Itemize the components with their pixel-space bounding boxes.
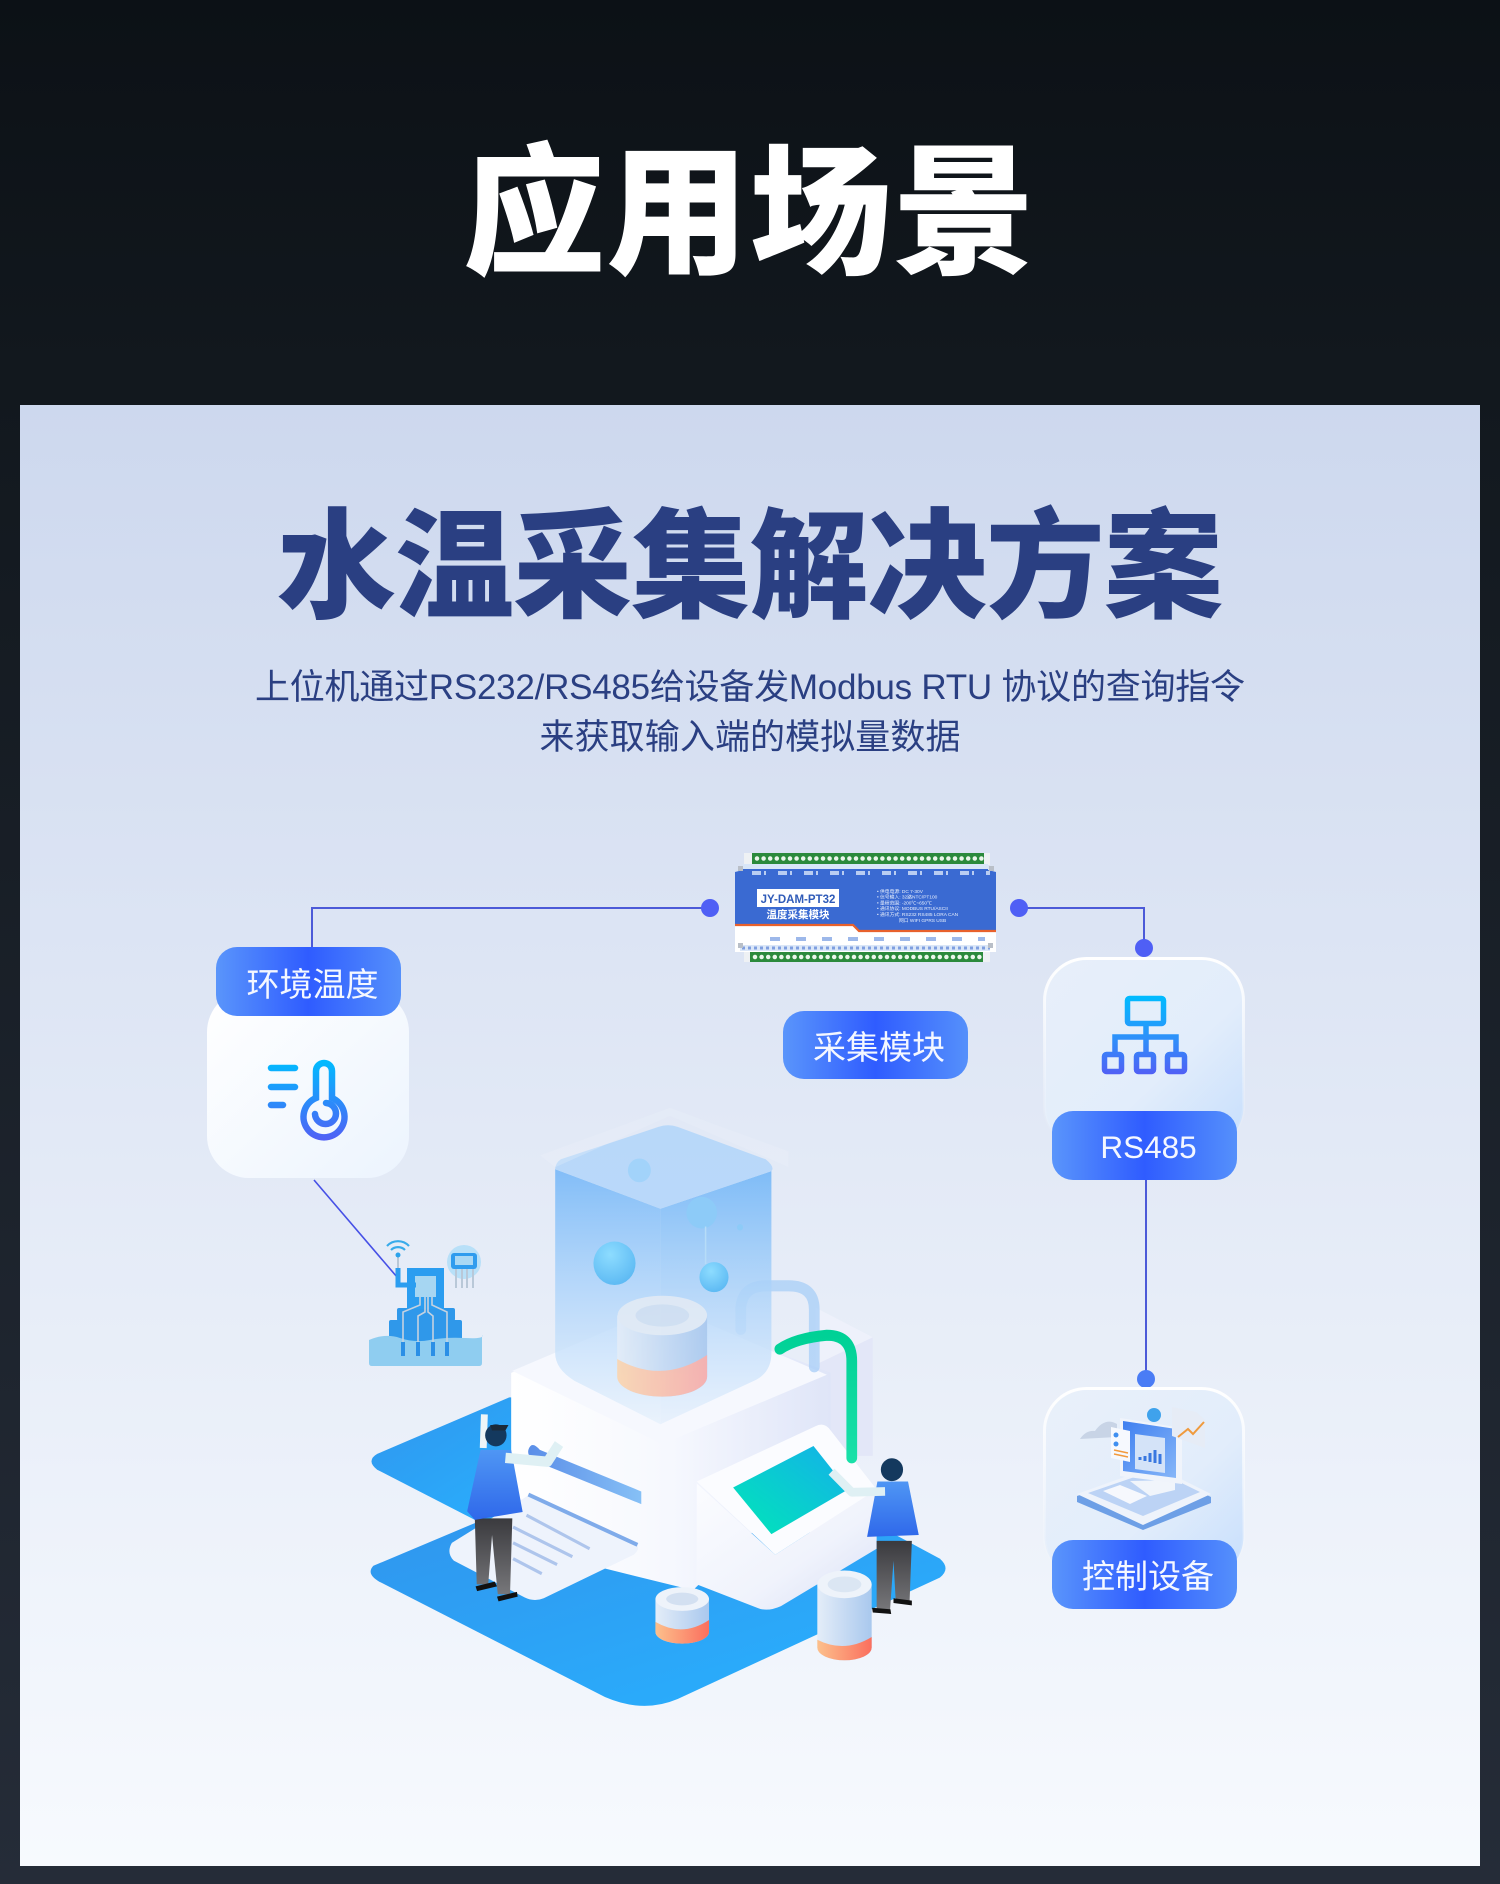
- icon: network tree: [1104, 998, 1184, 1072]
- printer slot: [528, 1445, 641, 1504]
- blue pipe: [741, 1286, 814, 1367]
- small cylinder: [655, 1587, 709, 1644]
- person: right: [831, 1458, 919, 1614]
- chip: ambient temperature: 环境温度: [246, 966, 378, 1003]
- description text: [255, 668, 1245, 757]
- device: acquisition module: • 通讯方式: RS232 RS485 LORA CAN: [877, 911, 959, 918]
- connector dots: [701, 899, 1155, 1388]
- card: RS485: [1044, 958, 1244, 1180]
- device: acquisition module: • 信号输入: 32路NTC/PT100: [877, 894, 938, 900]
- device: acquisition module: 网口 WIFI GPRS USB: [899, 918, 946, 924]
- icon: computer on platform: [1077, 1407, 1211, 1530]
- connector lines: [312, 908, 1146, 1378]
- chip: control equipment: 控制设备: [1082, 1558, 1214, 1595]
- touch screen: [733, 1446, 848, 1534]
- device: acquisition module: • 通讯协议: MODBUS RTU/ASCII: [877, 905, 948, 912]
- chip: acquisition module: 采集模块: [813, 1029, 945, 1066]
- icon: water temperature sensor: [369, 1241, 482, 1366]
- chip: control equipment: [1052, 1540, 1237, 1609]
- paper tray: [449, 1495, 638, 1600]
- card: ambient temperature: [207, 947, 409, 1178]
- machine body: [511, 1310, 831, 1590]
- back block: [815, 1308, 873, 1456]
- panel: solution: [20, 405, 1480, 1866]
- icon: thermometer: [271, 1063, 344, 1137]
- chip: ambient temperature: [216, 947, 401, 1016]
- chip: RS485: [1052, 1111, 1237, 1180]
- description text: 上位机通过RS232/RS485给设备发Modbus RTU 协议的查询指令: [255, 668, 1245, 707]
- illustration: water analysis machine: [371, 1108, 946, 1706]
- heading: water temperature solution: 水温采集解决方案: [277, 501, 1223, 634]
- cylinder in tank: [617, 1296, 707, 1397]
- blue floor plates: [371, 1397, 946, 1706]
- card: control equipment: [1044, 1388, 1244, 1609]
- device: acquisition module: • 供电电源: DC 7-30V: [877, 888, 924, 895]
- chip: acquisition module: [783, 1011, 968, 1079]
- tall cylinder: [817, 1571, 872, 1660]
- title: 应用场景: [463, 135, 1035, 294]
- device: acquisition module: • 量程范围: -200℃~650℃: [877, 900, 932, 906]
- device: acquisition module: [735, 853, 996, 962]
- device: acquisition module: JY-DAM-PT32: [761, 894, 835, 906]
- device: acquisition module: 温度采集模块: [766, 908, 830, 921]
- description text: 来获取输入端的模拟量数据: [540, 718, 960, 757]
- chip: RS485: RS485: [1100, 1129, 1197, 1165]
- control console: [697, 1425, 877, 1610]
- glass tank: [540, 1108, 789, 1424]
- person: left: [467, 1414, 559, 1601]
- green pipe: [780, 1335, 852, 1458]
